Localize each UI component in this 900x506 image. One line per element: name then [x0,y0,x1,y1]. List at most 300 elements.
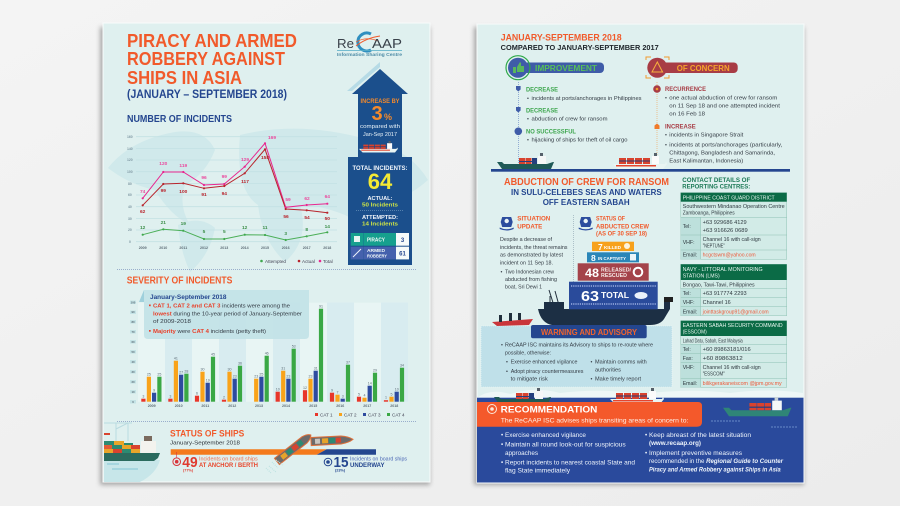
bar chart: severity of incidents: 45 [211,353,215,357]
bar chart: severity of incidents: 19 [206,379,210,383]
bar chart: severity of incidents [130,300,408,418]
block: status of abducted crew heading: (AS OF 30 SEP 18) [596,231,647,238]
heading: comparison period: COMPARED TO JANUARY-SEPTEMBER 2017 [501,43,659,52]
line chart: number of incidents: 30 [128,217,132,221]
line chart: number of incidents: 91 [201,192,207,198]
callout: severity summary: of 2009-2018 [153,319,191,325]
arrow: increase by 3%: Jan-Sep 2017 [363,132,397,138]
list: recommendation left: • [501,460,503,467]
title: ROBBERY AGAINST [127,48,286,69]
list: concern items: incidents at ports/anchorages (particularly, [669,143,783,149]
list: improvement items: NO SUCCESSFUL [526,129,576,135]
bar chart: severity of incidents: 2016 [336,404,344,408]
line chart: number of incidents: 60 [128,193,132,197]
bar chart: severity of incidents: 30 [131,370,135,374]
ship: recommendation decoration [711,397,797,427]
heading: contact details [682,178,751,191]
block: situation update: SITUATION [517,216,551,223]
list: recommendation left: Maintain all round look-out for suspicious [505,442,626,449]
line chart: number of incidents: 129 [241,157,249,163]
line chart: number of incidents: 2014 [241,246,249,250]
logo: ReCAAP: Information Sharing Centre [337,52,403,57]
panel: warning and advisory: WARNING AND ADVISORY [541,328,638,337]
bar chart: severity of incidents: 4 [363,394,365,398]
line chart: number of incidents: 12 [140,225,146,231]
line chart: number of incidents: 2011 [179,246,187,250]
list: improvement items: DECREASE [526,108,558,114]
block: situation update: • [500,269,502,275]
line chart: number of incidents: Actual [302,259,315,264]
stat: 49 at anchor: 49 [182,454,198,471]
list: concern items [653,85,783,165]
table: Philippine Coast Guard District: Southwestern Mindanao Operation Centre [683,204,785,210]
list: recommendation right: recommended in the Regional Guide to Counter [649,458,784,465]
panel: warning and advisory: possible, otherwise: [505,351,551,357]
container: 7 killed: 7 [598,242,603,252]
heading: abduction of crew: IN SULU-CELEBES SEAS AND WATERS [511,188,662,197]
panel: total incidents: ACTUAL: [368,196,393,202]
bar chart: severity of incidents: 70 [131,330,135,334]
row: piracy count: 3 [401,238,405,244]
line chart: number of incidents: 80 [128,182,132,186]
block: situation update: boat, Sri Dewi 1 [505,285,542,291]
stat: 15 underway: (23%) [335,468,346,472]
bar chart: severity of incidents: 30 [201,368,205,372]
bar chart: severity of incidents: 60 [131,340,135,344]
badge: improvement: IMPROVEMENT [535,64,597,73]
panel: warning and advisory: ReCAAP ISC maintains its Advisory to ships to re-route where [505,343,653,349]
bar chart: severity of incidents: CAT 2 [344,412,357,418]
line chart: number of incidents: 119 [179,163,187,169]
bar chart: severity of incidents: CAT 4 [392,412,405,418]
table: Eastern Sabah Security Command: (ESSCOM) [683,330,707,336]
table: Philippine Coast Guard District [681,193,787,259]
panel: total incidents [348,157,412,265]
table: Eastern Sabah Security Command: Lahad Datu, Sabah, East Malaysia [683,338,743,344]
icon: ship under attack two [311,435,353,446]
line chart: number of incidents: 54 [304,215,310,221]
list: recommendation right: Piracy and Armed Robbery against Ships in Asia [649,467,781,474]
bar chart: severity of incidents: 0 [132,400,134,404]
list: recommendation right: Implement preventive measures [649,450,742,457]
bar chart: severity of incidents: 31 [281,367,285,371]
block: situation update: incident on 11 Sep 18. [500,260,553,266]
heading: status of ships [170,429,244,446]
bar chart: severity of incidents: CAT 3 [368,412,381,418]
stat: 15 underway: 15 [334,454,348,471]
illustration: pirate boat [492,313,533,326]
table: Philippine Coast Guard District: Email: [683,252,697,258]
logo: ReCAAP: Re [337,36,354,51]
line chart: number of incidents: 99 [161,188,166,194]
bar chart: severity of incidents: 27 [179,371,183,375]
line chart: number of incidents: 117 [241,179,249,185]
line chart: number of incidents: 94 [222,191,227,197]
table: Philippine Coast Guard District: Tel: [683,224,691,230]
heading: status of ships: STATUS OF SHIPS [170,429,244,440]
panel: right poster [474,24,804,485]
container: 48 released: RELEASED/ [601,268,632,274]
line chart: number of incidents: 62 [304,196,310,202]
table: Navy littoral monitoring station: jointtaskgroup91@gmail.com [702,309,769,315]
bar chart: severity of incidents: 23 [254,375,258,379]
table: Navy littoral monitoring station: NAVY - LITTORAL MONITORING [683,267,763,273]
container: 8 in captivity [587,252,639,263]
heading: severity of incidents: SEVERITY OF INCIDENTS [127,276,233,287]
bar chart: severity of incidents: 7 [336,391,338,395]
panel: warning and advisory: • [590,377,592,383]
list: recommendation right: Keep abreast of the latest situation [649,432,752,439]
bar chart: severity of incidents: 2009 [148,404,156,408]
block: situation update: incidents, the threat remains [500,245,568,251]
table: Navy littoral monitoring station: VHF: [683,300,695,306]
table: Eastern Sabah Security Command: +60 89863812 [703,356,743,362]
heading: number of incidents: NUMBER OF INCIDENTS [127,114,232,125]
list: recommendation right: (www.recaap.org) [649,440,701,447]
bar chart: severity of incidents: 2013 [255,404,263,408]
illustration: port and cargo ship [104,423,160,482]
line chart: number of incidents: 169 [268,135,276,141]
row: piracy count [351,233,409,246]
bar chart: severity of incidents: 2011 [201,404,209,408]
line chart: number of incidents: 160 [127,135,133,139]
table: Eastern Sabah Security Command [681,321,787,387]
arrow: increase by 3%: % [384,112,392,122]
panel: total incidents: 50 Incidents [362,202,398,208]
bar chart: severity of incidents: 28 [184,370,188,374]
list: improvement items: hijacking of ships for theft of oil cargo [532,138,628,144]
table: Eastern Sabah Security Command: bilikgerakaneiscom @jpm.gov.my [703,381,782,387]
table: Navy littoral monitoring station: Tel: [683,291,691,297]
line chart: number of incidents: 11 [262,225,268,231]
line chart: number of incidents: 21 [161,220,166,226]
bar chart: severity of incidents: 12 [303,386,307,390]
bar chart: severity of incidents: 2018 [390,404,398,408]
line chart: number of incidents: 62 [140,209,146,215]
table: Philippine Coast Guard District: Zamboanga, Philippines [683,210,735,216]
table: Navy littoral monitoring station: +63 917774 2293 [703,291,747,297]
line chart: number of incidents: Attempted [265,259,286,264]
panel: left poster [100,23,430,485]
list: concern items: one actual abduction of crew for ransom [669,95,778,101]
line chart: number of incidents: 2015 [261,246,269,250]
block: status of abducted crew heading: STATUS OF [596,215,625,222]
line chart: number of incidents: 59 [285,197,291,203]
table: Eastern Sabah Security Command: Email: [683,381,697,387]
line chart: number of incidents: 2018 [323,246,331,250]
list: recommendation right [645,432,784,474]
list: recommendation right: • [645,450,647,457]
bar chart: severity of incidents: 9 [153,389,155,393]
arrow: increase by 3% [347,62,408,157]
bar chart: severity of incidents: 2 [223,396,225,400]
table: Philippine Coast Guard District: PHILIPPINE COAST GUARD DISTRICT [683,196,776,202]
line chart: number of incidents: 50 [325,216,330,222]
logo: ReCAAP [337,33,403,57]
list: concern items: East Kalimantan, Indonesia) [669,159,744,165]
list: concern items: on 16 Feb 18 [669,111,705,117]
line chart: number of incidents: 120 [127,158,133,162]
bar chart: severity of incidents: 3 [142,395,144,399]
list: improvement items: incidents at ports/anchorages in Philippines [532,96,642,102]
table: Eastern Sabah Security Command: EASTERN SABAH SECURITY COMMAND [683,323,783,329]
panel: total incidents: ATTEMPTED: [362,215,398,221]
table: Eastern Sabah Security Command: VHF: [683,365,695,371]
bar chart: severity of incidents: 41 [174,357,178,361]
wake: splash dots [266,460,283,473]
table: Philippine Coast Guard District: VHF: [683,240,695,246]
line chart: number of incidents: 20 [128,228,132,232]
bar chart: severity of incidents: 2015 [309,404,317,408]
callout: severity summary: CAT 1, CAT 2 and CAT 3 incidents were among the [153,304,290,310]
table: Eastern Sabah Security Command: Channel 16 with call-sign [703,365,761,371]
icon: ship under attack one [274,432,313,465]
line chart: number of incidents: 5 [223,229,226,235]
list: improvement items: abduction of crew for ransom [532,117,608,123]
list: concern items: on 11 Sep 18 and one attempted incident [669,103,781,109]
heading: comparison period [501,33,659,52]
table: Philippine Coast Guard District: +63 916626 0689 [703,228,748,234]
list: concern items: • [665,143,667,149]
title [127,30,297,101]
illustration: abducted crew container ship [538,242,673,325]
bar chart: severity of incidents: 53 [292,345,296,349]
bar chart: severity of incidents: 20 [131,380,135,384]
heading: contact details: CONTACT DETAILS OF [682,178,751,184]
panel: warning and advisory: Make timely report [595,377,642,383]
bar chart: severity of incidents: 23 [308,375,312,379]
row: armed robbery count: 61 [399,252,406,258]
bar: status split [171,449,376,455]
line chart: number of incidents: 100 [179,189,188,195]
bar chart: severity of incidents: 3 [342,395,344,399]
heading: status of ships: January-September 2018 [170,440,240,446]
line chart: number of incidents: 56 [283,214,289,220]
table: Philippine Coast Guard District: +63 929686 4129 [703,220,747,226]
stat: 15 underway: Incidents on board ships [350,457,407,463]
badge: of concern: OF CONCERN [677,64,730,73]
bar chart: severity of incidents: CAT 1 [320,412,333,418]
bar chart: severity of incidents: 46 [265,352,269,356]
container: 63 total [569,282,658,309]
table: Navy littoral monitoring station: Channel 16 [703,300,731,306]
list: concern items: INCREASE [665,124,696,130]
bar chart: severity of incidents: 25 [157,373,161,377]
list: improvement items: • [527,96,529,102]
bar chart: severity of incidents: 5 [358,393,360,397]
list: recommendation left: approaches [505,450,538,457]
line chart: number of incidents: 120 [159,161,168,167]
table: Eastern Sabah Security Command: Tel: [683,347,691,353]
heading: abduction of crew: OFF EASTERN SABAH [543,198,630,207]
panel: warning and advisory: to mitigate risk [511,376,548,382]
line chart: number of incidents: 5 [203,229,206,235]
block: status of abducted crew heading: ABDUCTED CREW [596,223,649,230]
heading: abduction of crew [504,177,669,207]
panel: recommendation: RECOMMENDATION [501,405,598,416]
list: improvement items: • [527,117,529,123]
line chart: number of incidents: 8 [305,227,308,233]
stat: 49 at anchor: AT ANCHOR / BERTH [199,463,258,469]
bar chart: severity of incidents: 14 [368,382,372,386]
bar chart: severity of incidents: 23 [233,375,237,379]
title: PIRACY AND ARMED [127,30,297,51]
table: Eastern Sabah Security Command: Fax: [683,356,693,362]
block: situation update [500,216,568,291]
illustration: ships on sea line [491,153,790,172]
bar chart: severity of incidents: 36 [238,362,242,366]
arrow: increase by 3%: 3 [371,103,383,125]
container: 7 killed: KILLED [604,245,622,250]
panel: warning and advisory: • [501,343,503,349]
callout: severity summary: Majority were CAT 4 incidents (petty theft) [153,329,266,335]
list: recommendation left: flag State immediately [505,468,571,475]
list: concern items: RECURRENCE [665,87,706,93]
list: recommendation left: Exercise enhanced vigilance [505,432,587,439]
table: Philippine Coast Guard District: hcgctswm@yahoo.com [703,252,756,258]
panel: recommendation: The ReCAAP ISC advises ships transiting areas of concern to: [501,417,689,424]
arrow: increase by 3%: compared with [360,124,400,130]
line chart: number of incidents: 40 [128,205,132,209]
line chart: number of incidents: 2013 [220,246,228,250]
line chart: number of incidents: 0 [129,240,131,244]
list: concern items: • [665,133,667,139]
table: Philippine Coast Guard District: Channel 16 with call-sign [703,237,761,243]
bar chart: severity of incidents: 90 [131,310,135,314]
bar chart: severity of incidents: 34 [400,364,404,368]
bar chart: severity of incidents: 6 [196,392,198,396]
list: concern items: • [665,95,667,101]
badge: of concern [646,57,738,78]
panel: warning and advisory: • [590,360,592,366]
container: 63 total: TOTAL [601,291,629,300]
panel: warning and advisory: • [506,369,508,375]
bar chart: severity of incidents: 1 [385,396,387,400]
table: Navy littoral monitoring station: STATION (LMS) [683,274,720,280]
block: situation update: abducted from fishing [505,277,557,283]
list: recommendation right: • [645,432,647,439]
line chart: number of incidents: 2009 [139,246,147,250]
line chart: number of incidents: 2017 [303,246,311,250]
container: 48 released [578,263,649,281]
panel: warning and advisory: Maintain comms with [595,360,647,366]
line chart: number of incidents: 19 [181,221,186,227]
icon: recommendation emblem [488,404,496,414]
bar chart: severity of incidents: 2010 [175,404,183,408]
panel: warning and advisory: Exercise enhanced vigilance [511,360,577,366]
title: SHIPS IN ASIA [127,67,242,88]
panel: total incidents: 14 Incidents [362,222,398,228]
panel: total incidents: TOTAL INCIDENTS: [352,166,408,172]
table: Eastern Sabah Security Command: "ESSCOM" [703,372,725,378]
row: armed robbery count: ROBBERY [367,254,387,258]
bar chart: severity of incidents: 10 [395,388,399,392]
bar chart: severity of incidents: 91 [319,305,323,309]
block: situation update: Despite a decrease of [500,237,552,243]
list: improvement items [514,86,642,144]
bar chart: severity of incidents: 2014 [282,404,290,408]
bar chart: severity of incidents: 31 [314,367,318,371]
bar chart: severity of incidents: 23 [286,375,290,379]
panel: recommendation [477,388,804,482]
list: concern items: Chittagong, Bangladesh and Samarinda, [669,151,776,157]
heading: contact details: REPORTING CENTRES: [682,185,750,191]
line chart: number of incidents: 2012 [200,246,208,250]
bar chart: severity of incidents: 100 [131,300,136,304]
line chart: number of incidents: 99 [222,174,227,180]
line chart: number of incidents: 3 [284,231,287,237]
callout: severity summary: January-September 2018 [150,294,227,301]
container: 8 in captivity: IN CAPTIVITY [598,256,626,261]
line chart: number of incidents: 64 [325,194,330,200]
panel: warning and advisory: Adopt piracy countermeasures [511,369,584,375]
bar chart: severity of incidents: 9 [331,389,333,393]
row: piracy count: PIRACY [367,238,386,244]
logo: ReCAAP: AAP [372,36,402,51]
line chart: number of incidents: 14 [325,224,330,230]
bar chart: severity of incidents: 10 [276,388,280,392]
list: recommendation left: Report incidents to nearest coastal State and [505,460,636,467]
table: Navy littoral monitoring station: Bongao, Tawi-Tawi, Philippines [683,282,755,288]
heading: abduction of crew: ABDUCTION OF CREW FOR RANSOM [504,177,669,188]
bar chart: severity of incidents: 50 [131,350,135,354]
bar chart: severity of incidents: 10 [131,390,135,394]
bar chart: severity of incidents: 37 [346,361,350,365]
block: situation update: Two Indonesian crew [505,269,554,275]
stat: 49 at anchor [173,452,258,472]
bar chart: severity of incidents: 29 [373,369,377,373]
bar chart: severity of incidents: 25 [259,373,263,377]
block: status of abducted crew heading [579,215,649,238]
stat: 49 at anchor: Incidents on board ships [199,457,258,463]
bar chart: severity of incidents: 2012 [228,404,236,408]
stat: 15 underway: UNDERWAY [350,463,384,469]
line chart: number of incidents: Total [323,259,333,264]
line chart: number of incidents: 158 [261,155,269,161]
bar chart: severity of incidents: 40 [131,360,135,364]
container: 63 total: 63 [581,289,599,305]
stat: 49 at anchor: (77%) [183,468,194,472]
line chart: number of incidents: 2016 [282,246,290,250]
container: 48 released: RESCUED [601,273,627,279]
table: Navy littoral monitoring station: Email: [683,309,697,315]
list: improvement items: DECREASE [526,87,558,93]
list: recommendation left [501,432,636,475]
list: improvement items: • [527,138,529,144]
container: 7 killed [592,242,634,252]
bar chart: severity of incidents: 30 [228,368,232,372]
stat: 15 underway [324,454,407,472]
table: Eastern Sabah Security Command: +60 89863181/016 [703,347,751,353]
table: Navy littoral monitoring station [681,264,787,316]
table: Philippine Coast Guard District: "NEPTUNE" [703,244,725,250]
callout: severity summary: lowest during the 10-year period of January-September [153,311,302,317]
arrow: increase by 3%: INCREASE BY [360,98,400,105]
bar chart: severity of incidents: 80 [131,320,135,324]
badge: improvement [506,56,604,80]
panel: warning and advisory: • [506,360,508,366]
line chart: number of incidents [127,135,337,264]
world map background [108,129,428,272]
bar chart: severity of incidents: 25 [147,373,151,377]
bar chart: severity of incidents: 5 [390,393,392,397]
row: armed robbery count: ARMED [367,248,386,253]
line chart: number of incidents: 2010 [159,246,167,250]
title: (JANUARY – SEPTEMBER 2018) [127,89,287,101]
line chart: number of incidents: 74 [140,189,146,195]
line chart: number of incidents: 140 [127,147,133,151]
heading: comparison period: JANUARY-SEPTEMBER 2018 [501,33,622,43]
